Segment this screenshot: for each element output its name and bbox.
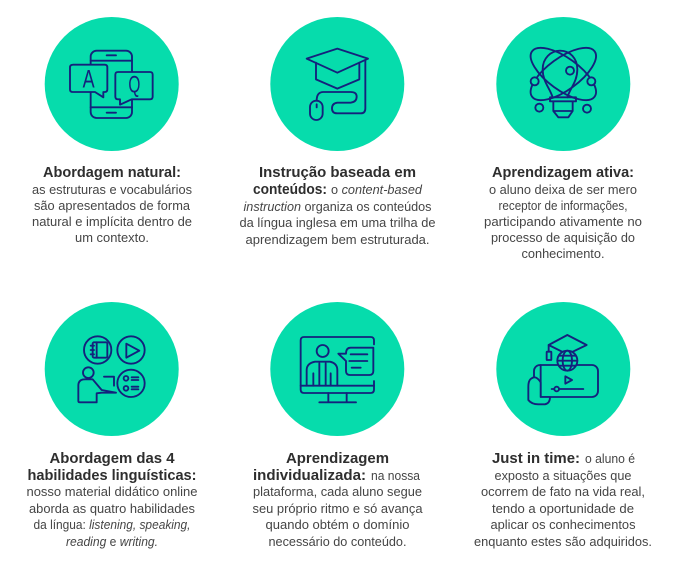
panel: aprendizagem ativa bbox=[484, 17, 642, 261]
icon: phone with A and Q speech bubbles: Q bbox=[128, 72, 140, 99]
text: just in time: Just in time: bbox=[492, 450, 580, 467]
teal circle: habilidades bbox=[45, 302, 179, 436]
panel: abordagem natural bbox=[32, 17, 192, 245]
teal circle: aprendizagem ativa bbox=[496, 17, 630, 151]
text: abordagem das 4 habilidades: reading e writing. bbox=[66, 534, 158, 549]
text: aprendizagem ativa bbox=[484, 164, 642, 261]
text: just in time bbox=[474, 450, 652, 549]
icon: phone with A and Q speech bubbles: A bbox=[83, 65, 95, 93]
text: just in time: exposto a situações que bbox=[494, 468, 632, 483]
text: abordagem das 4 habilidades: nosso material didático online bbox=[26, 484, 198, 499]
panel: instrução baseada em conteúdos bbox=[240, 17, 436, 247]
text: abordagem das 4 habilidades bbox=[26, 450, 198, 549]
text: just in time: aplicar os conhecimentos bbox=[490, 517, 636, 532]
text: abordagem das 4 habilidades: da língua: listening, speaking, bbox=[34, 517, 190, 532]
icon: monitor with instructor and speech bubble bbox=[301, 337, 374, 402]
text: aprendizagem individualizada: necessário do conteúdo. bbox=[268, 534, 406, 549]
icon: light bulb rocket with orbits bbox=[523, 38, 604, 117]
text: instrução baseada em conteúdos bbox=[240, 164, 436, 247]
text: aprendizagem individualizada: Aprendizagem bbox=[286, 450, 389, 467]
panel: just in time bbox=[474, 302, 652, 549]
text: abordagem das 4 habilidades: Abordagem das 4 bbox=[50, 450, 175, 467]
text: instrução baseada em conteúdos: aprendizagem bem estruturada. bbox=[246, 232, 430, 247]
text: just in time: tendo a oportunidade de bbox=[492, 501, 634, 516]
icon: person at desk with notebook, play and list circles bbox=[78, 336, 145, 402]
text: aprendizagem individualizada bbox=[252, 450, 423, 549]
icon: hand holding video tablet with globe and graduation cap bbox=[528, 335, 598, 404]
text: aprendizagem individualizada: quando obtém o domínio bbox=[266, 517, 410, 532]
panel: abordagem das 4 habilidades bbox=[26, 302, 198, 549]
teal circle: just in time bbox=[496, 302, 630, 436]
text: aprendizagem ativa: receptor de informações, bbox=[498, 198, 628, 213]
text: instrução baseada em conteúdos: da língua inglesa em uma trilha de bbox=[240, 215, 436, 230]
text: instrução baseada em conteúdos: conteúdos: bbox=[253, 181, 327, 198]
text: just in time: ocorrem de fato na vida real, bbox=[481, 484, 645, 499]
text: abordagem natural: natural e implícita dentro de bbox=[32, 214, 192, 229]
teal circle: individualizada bbox=[270, 302, 404, 436]
text: aprendizagem individualizada: plataforma, cada aluno segue bbox=[253, 484, 422, 499]
teal circle: instrução bbox=[270, 17, 404, 151]
icon: phone with A and Q speech bubbles bbox=[70, 51, 153, 118]
text: abordagem das 4 habilidades: habilidades linguísticas: bbox=[28, 467, 196, 484]
teal circle: abordagem natural bbox=[45, 17, 179, 151]
text: aprendizagem individualizada: na nossa bbox=[371, 468, 421, 483]
text: abordagem natural: são apresentados de forma bbox=[34, 198, 191, 213]
text: aprendizagem individualizada: seu próprio ritmo e só avança bbox=[252, 501, 423, 516]
text: abordagem natural: Abordagem natural: bbox=[43, 164, 181, 181]
text: instrução baseada em conteúdos: instruction organiza os conteúdos bbox=[244, 199, 432, 214]
text: aprendizagem ativa: processo de aquisição do bbox=[491, 230, 635, 245]
text: aprendizagem ativa: participando ativamente no bbox=[484, 214, 642, 229]
text: abordagem natural: as estruturas e vocabulários bbox=[32, 182, 192, 197]
text: aprendizagem ativa: conhecimento. bbox=[522, 246, 604, 261]
text: instrução baseada em conteúdos: Instrução baseada em bbox=[259, 164, 416, 181]
text: abordagem natural bbox=[32, 164, 192, 245]
text: just in time: enquanto estes são adquiridos. bbox=[474, 534, 652, 549]
icon: graduation cap with mouse cable bbox=[307, 49, 368, 120]
text: aprendizagem individualizada: individualizada: bbox=[253, 467, 366, 484]
text: abordagem das 4 habilidades: aborda as quatro habilidades bbox=[29, 501, 195, 516]
text: aprendizagem ativa: o aluno deixa de ser mero bbox=[489, 182, 637, 197]
text: aprendizagem ativa: Aprendizagem ativa: bbox=[492, 164, 634, 181]
text: abordagem natural: um contexto. bbox=[75, 230, 149, 245]
text: just in time: o aluno é bbox=[585, 451, 635, 466]
panel: aprendizagem individualizada bbox=[252, 302, 423, 549]
text: instrução baseada em conteúdos: o content-based bbox=[331, 182, 423, 197]
